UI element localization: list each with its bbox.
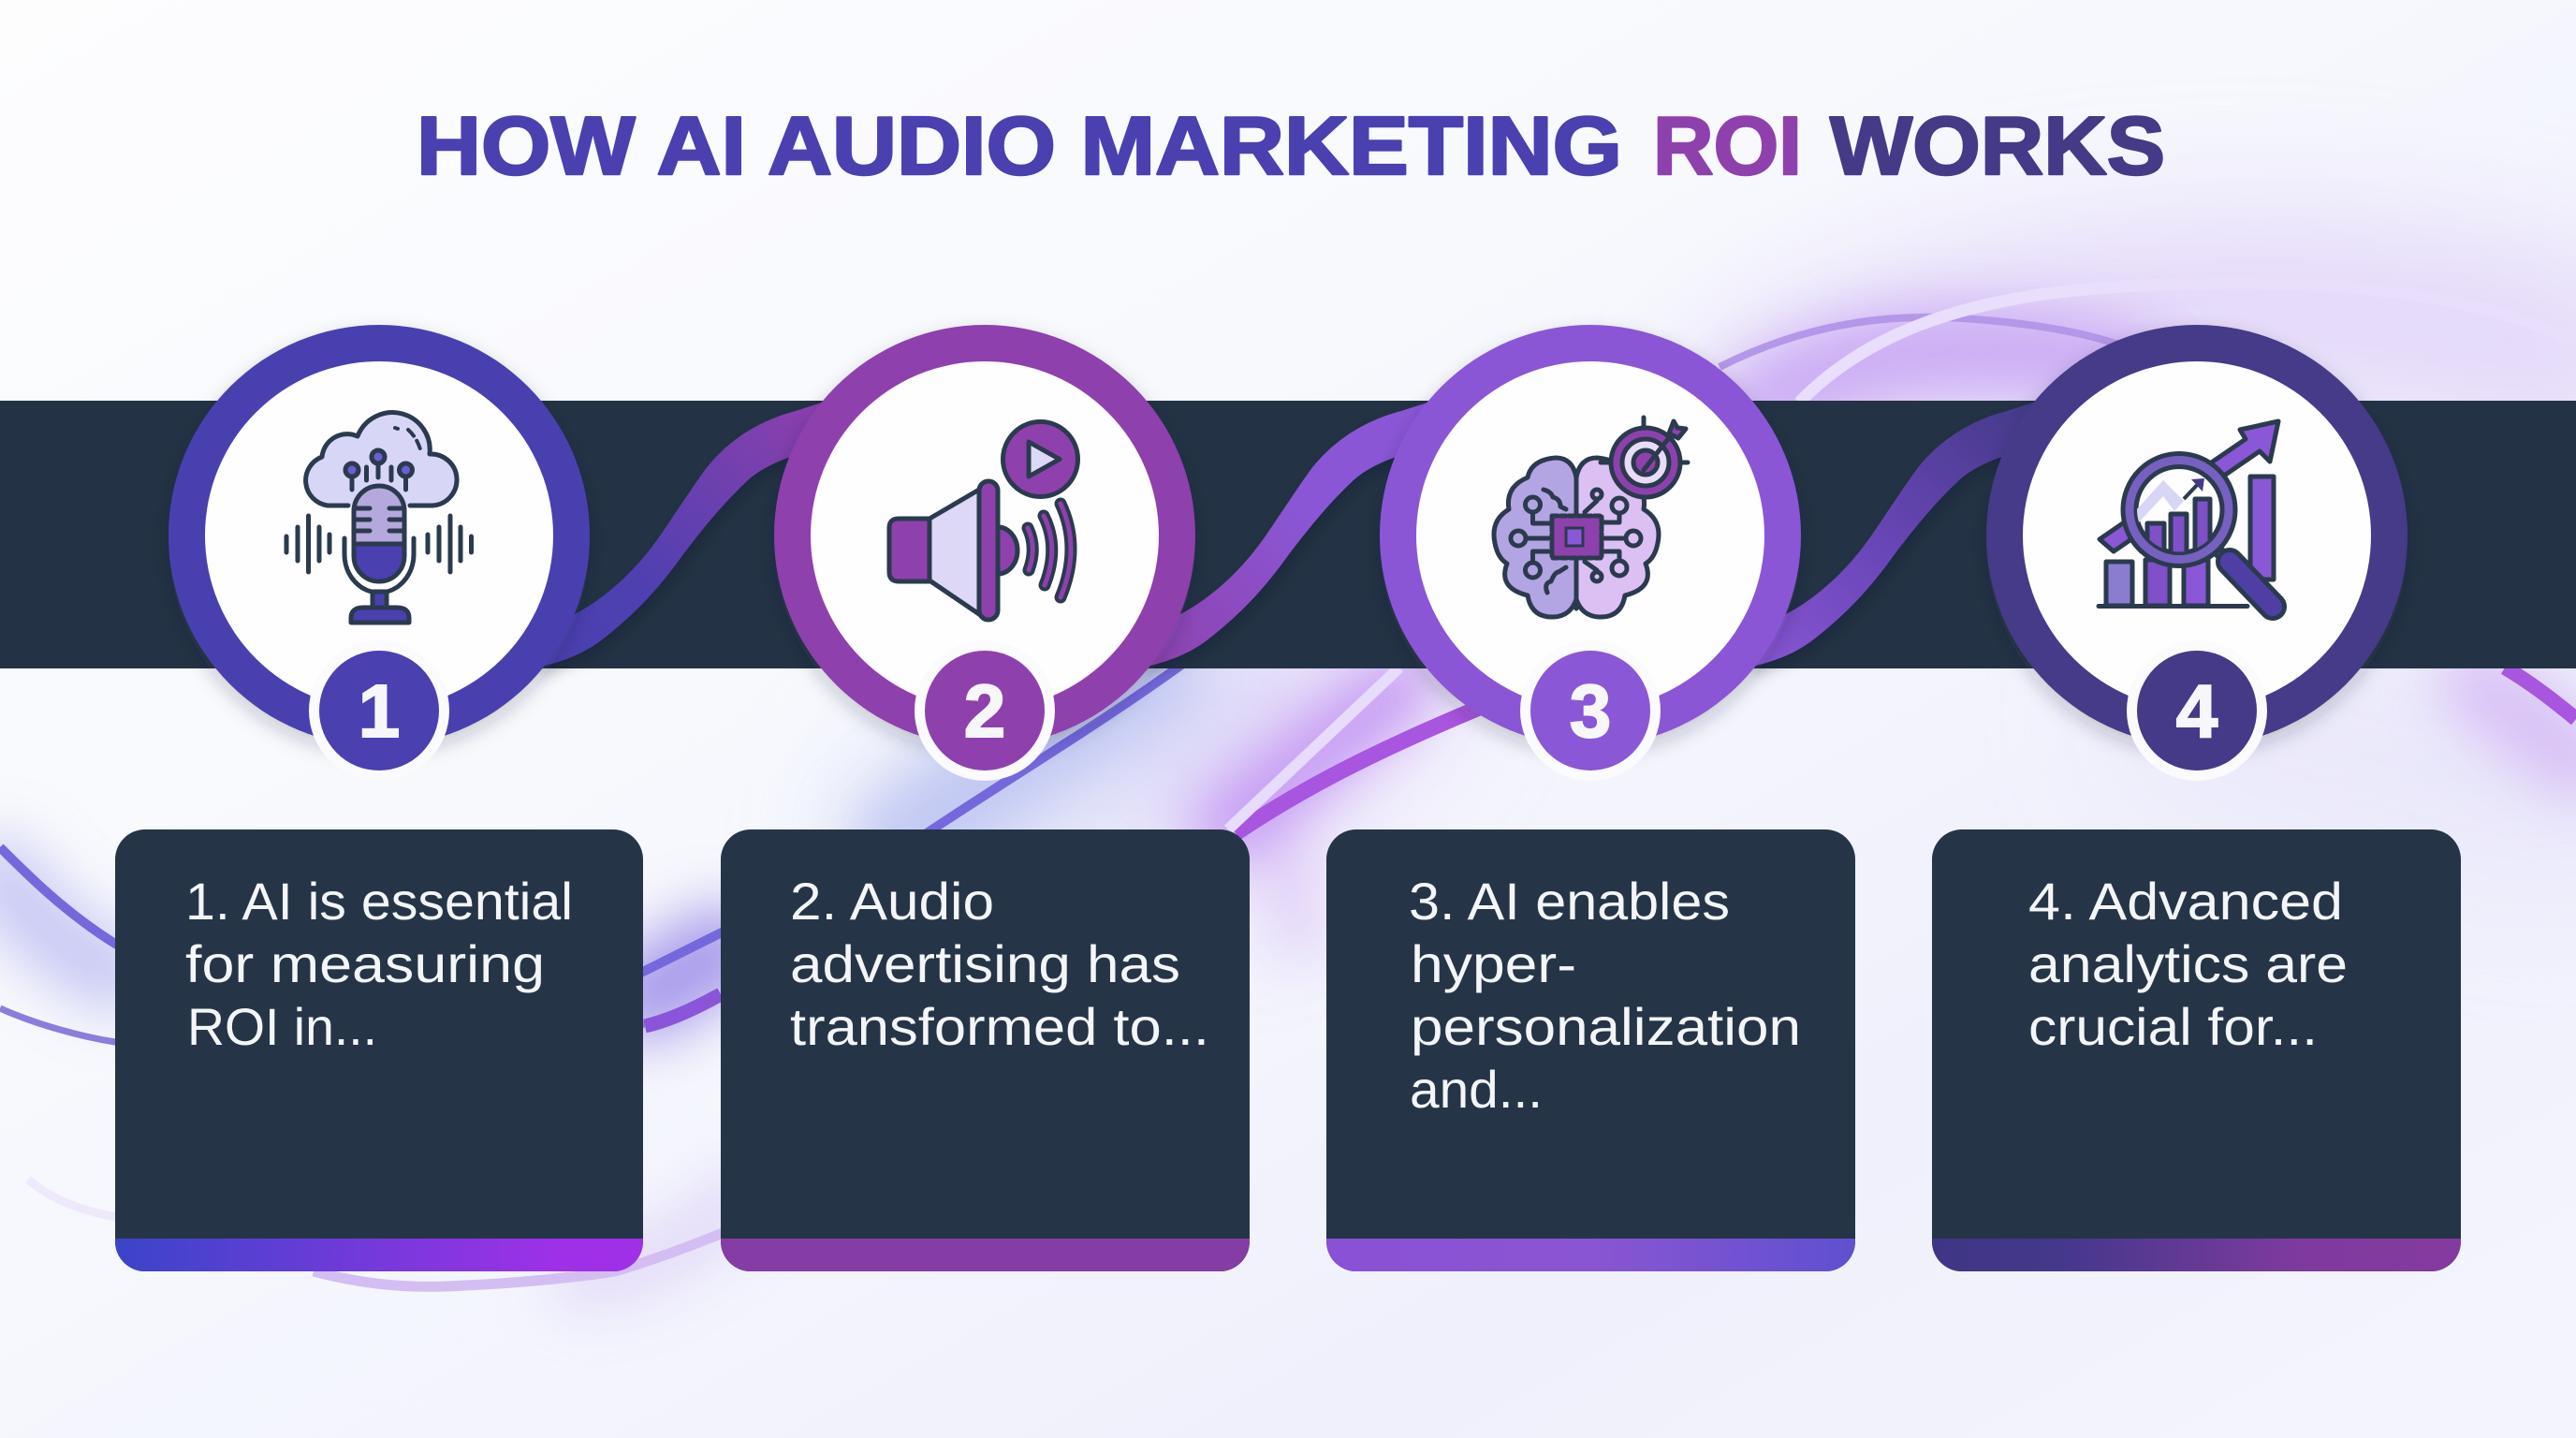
step 2 circle xyxy=(774,325,1195,781)
card 2 text: 2. Audio xyxy=(790,872,994,931)
card 1 text: for measuring xyxy=(185,934,545,993)
icon: analytics magnifier xyxy=(2099,421,2278,607)
card 3 accent stripe xyxy=(1326,1239,1855,1271)
card 3 text: and... xyxy=(1410,1060,1543,1119)
panel: card 3 xyxy=(1326,829,1855,1271)
card 4 accent stripe xyxy=(1932,1239,2461,1271)
card 2 text xyxy=(790,872,1209,1056)
connector ribbon 2 to 3 xyxy=(1139,403,1427,668)
card 2 text: transformed to... xyxy=(790,997,1209,1056)
title: HOW AI AUDIO MARKETING xyxy=(417,99,1622,192)
card 1 text: 1. AI is essential xyxy=(185,872,573,931)
card 3 text: personalization xyxy=(1411,997,1801,1056)
card 3 text: 3. AI enables xyxy=(1409,872,1730,931)
background swooshes: soft glows xyxy=(0,349,2576,1278)
card 1 text: ROI in... xyxy=(187,997,377,1056)
dark horizontal band xyxy=(0,401,2576,668)
badge 3: 3 xyxy=(1570,669,1611,753)
card 2 text: advertising has xyxy=(790,934,1180,993)
card 1 text xyxy=(185,872,573,1056)
card 4 text: 4. Advanced xyxy=(2028,872,2343,931)
background swooshes: wide soft washes xyxy=(936,310,2576,843)
connector ribbon 1 to 2 xyxy=(534,403,822,668)
badge 4 xyxy=(2127,640,2267,781)
title xyxy=(417,99,2165,192)
icon: AI brain with target xyxy=(1494,418,1688,617)
badge 4: 4 xyxy=(2176,669,2218,753)
step 4 circle xyxy=(1986,325,2408,781)
panel: card 2 xyxy=(721,829,1250,1271)
card 4 text: analytics are xyxy=(2028,934,2348,993)
badge 1 xyxy=(309,640,449,781)
step 3 circle xyxy=(1380,325,1801,781)
background swooshes: thin ribbons xyxy=(0,283,2576,1286)
card 3 text: hyper- xyxy=(1411,934,1576,993)
badge 3 xyxy=(1520,640,1661,781)
badge 2: 2 xyxy=(964,669,1005,753)
card 3 text xyxy=(1409,872,1801,1119)
icon: cloud microphone xyxy=(286,413,472,623)
card 2 accent stripe xyxy=(721,1239,1250,1271)
panel: card 1 xyxy=(115,829,643,1271)
card 4 text: crucial for... xyxy=(2028,997,2318,1056)
badge 2 xyxy=(915,640,1055,781)
card 1 accent stripe xyxy=(115,1239,643,1271)
icon: speaker with play button xyxy=(889,421,1078,620)
badge 1: 1 xyxy=(359,669,400,753)
card 4 text xyxy=(2028,872,2348,1056)
panel: card 4 xyxy=(1932,829,2461,1271)
title: ROI xyxy=(1653,99,1802,192)
connector ribbon 3 to 4 xyxy=(1745,403,2033,668)
step 1 circle xyxy=(168,325,590,781)
title: WORKS xyxy=(1830,99,2165,192)
